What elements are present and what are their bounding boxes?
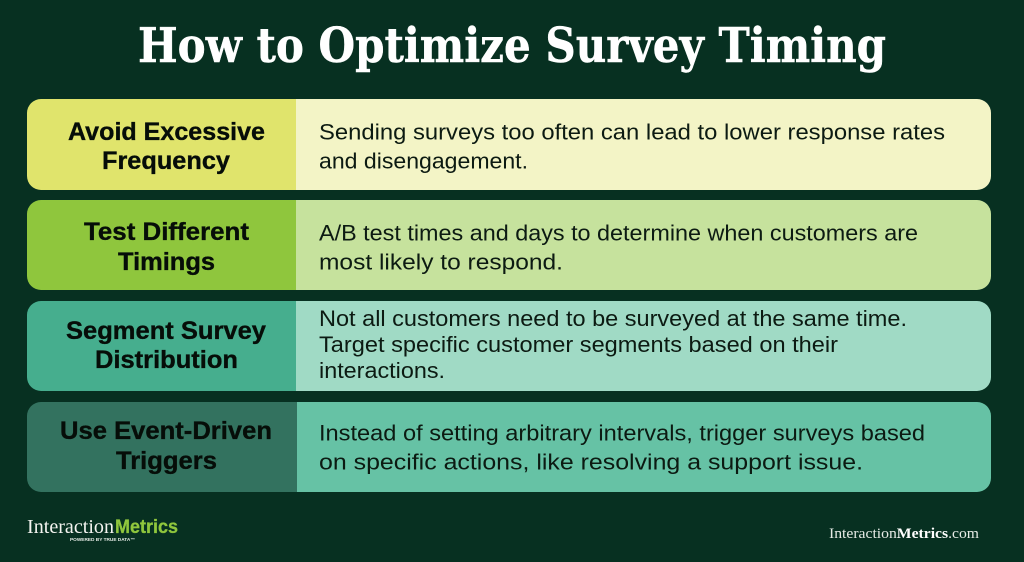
logo: interaction metrics (27, 516, 178, 542)
text: test different timings (319, 220, 918, 274)
heading: use event-driven triggers: Triggers (116, 447, 217, 475)
text: avoid excessive frequency (319, 120, 945, 174)
heading: avoid excessive frequency: Frequency (102, 147, 230, 175)
text: segment survey distribution: interactions. (319, 358, 445, 383)
heading: test different timings: Timings (118, 248, 215, 276)
text: test different timings: most likely to respond. (319, 250, 563, 274)
panel: test different timings (27, 200, 991, 290)
heading: segment survey distribution: Segment Survey (66, 317, 266, 345)
panel: avoid excessive frequency (27, 99, 991, 190)
heading: avoid excessive frequency (68, 118, 265, 175)
heading: avoid excessive frequency: Avoid Excessive (68, 118, 265, 146)
heading: use event-driven triggers: Use Event-Driven (60, 417, 272, 445)
heading: test different timings (84, 218, 250, 276)
heading: test different timings: Test Different (84, 218, 250, 246)
text: avoid excessive frequency: and disengagement. (319, 148, 528, 174)
logo: interaction metrics: Metrics (115, 517, 178, 538)
text: use event-driven triggers (319, 420, 925, 474)
text: segment survey distribution: Target specific customer segments based on their (319, 332, 839, 357)
heading: segment survey distribution: Distribution (95, 346, 238, 374)
text: avoid excessive frequency: Sending surveys too often can lead to lower response rates (319, 120, 945, 144)
text: test different timings: A/B test times and days to determine when customers are (319, 220, 918, 246)
text: segment survey distribution: Not all customers need to be surveyed at the same time. (319, 306, 907, 331)
logo: interaction metrics: Interaction (27, 516, 114, 538)
panel: segment survey distribution (27, 301, 991, 391)
title: How to Optimize Survey Timing (138, 18, 886, 74)
heading: use event-driven triggers (60, 417, 272, 475)
heading: segment survey distribution (66, 317, 266, 374)
website url: InteractionMetrics.com (829, 526, 979, 542)
text: segment survey distribution (319, 306, 907, 383)
logo: interaction metrics: POWERED BY TRUE DATA™ (70, 537, 135, 542)
panel: use event-driven triggers (27, 402, 991, 492)
text: use event-driven triggers: on specific actions, like resolving a support issue. (319, 450, 863, 474)
text: use event-driven triggers: Instead of setting arbitrary intervals, trigger surveys based (319, 420, 925, 446)
